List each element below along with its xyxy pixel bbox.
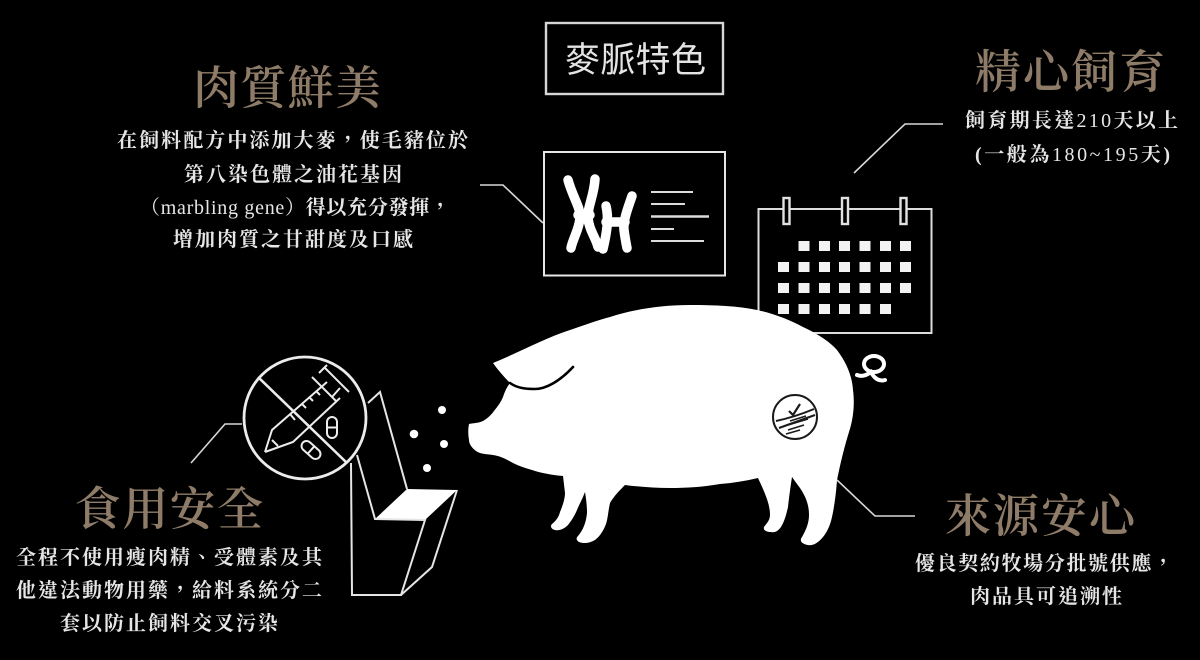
main title box: 麥脈特色 [565, 32, 706, 83]
text block: careful raising: 飼育期長達210天以上 [965, 109, 1178, 132]
text block: reassuring source [915, 551, 1173, 608]
text block: careful raising: (一般為180~195天) [975, 143, 1170, 166]
syringe [265, 365, 349, 452]
heading: reassuring source: 來源安心 [945, 480, 1139, 546]
text block: careful raising [965, 109, 1178, 166]
text block: meat quality: 增加肉質之甘甜度及口感 [173, 227, 413, 251]
text block: reassuring source: 優良契約牧場分批號供應， [915, 551, 1173, 575]
pills [299, 417, 337, 461]
icon: feed pellets [410, 406, 448, 472]
ear line [510, 367, 573, 389]
text block: meat quality: 在飼料配方中添加大麥，使毛豬位於 [117, 129, 468, 152]
text block: meat quality [117, 129, 468, 251]
arrow: meat quality leader [480, 185, 543, 223]
text block: food safety: 套以防止飼料交叉污染 [60, 611, 278, 635]
icon: calendar [758, 198, 932, 333]
text block: meat quality: 第八染色體之油花基因 [184, 162, 402, 186]
icon: feeder [351, 392, 457, 595]
main title box [546, 23, 723, 94]
text block: food safety: 全程不使用瘦肉精、受體素及其 [16, 545, 325, 569]
arrow: food safety leader [191, 424, 242, 463]
arrow: source leader [837, 480, 915, 516]
text block: meat quality: （marbling gene）得以充分發揮， [140, 196, 450, 219]
icon: pig [468, 305, 885, 545]
heading: food safety: 食用安全 [75, 473, 263, 539]
heading: meat quality: 肉質鮮美 [193, 52, 381, 118]
icon: chromosomes [568, 179, 632, 249]
text block: reassuring source: 肉品具可追溯性 [970, 584, 1122, 608]
icon: certification stamp [773, 395, 817, 439]
tail [857, 356, 885, 381]
icon: chromosome panel [544, 152, 725, 276]
heading: careful raising: 精心飼育 [975, 36, 1165, 102]
icon: text lines [651, 192, 709, 241]
arrow: careful raising leader [854, 124, 943, 173]
icon: no syringe or pills [244, 357, 366, 479]
text block: food safety: 他違法動物用藥，給料系統分二 [16, 578, 322, 602]
text block: food safety [16, 545, 325, 635]
